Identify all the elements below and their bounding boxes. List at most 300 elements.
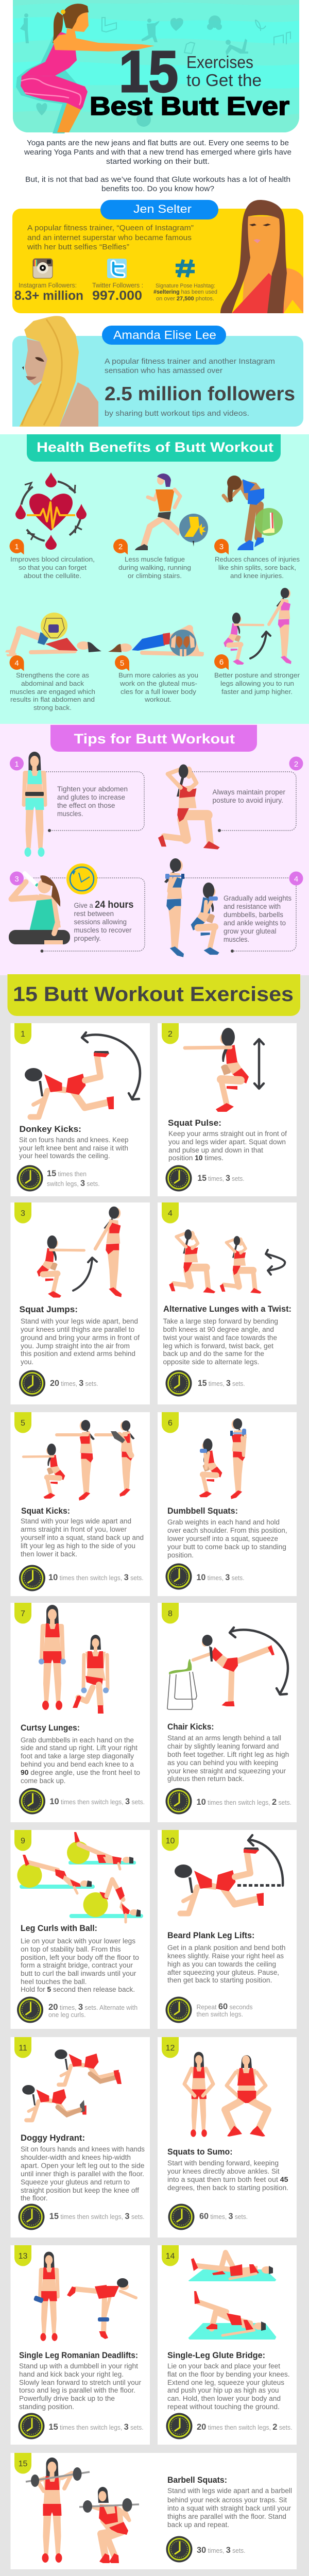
clock icon xyxy=(19,1788,45,1815)
number tab xyxy=(14,2245,31,2266)
number tab: 7 xyxy=(21,1609,25,1618)
tip 2 figure xyxy=(158,765,220,850)
card 11 doggy hydrant xyxy=(10,2037,150,2238)
number tab: 15 xyxy=(19,2460,28,2468)
number tab xyxy=(162,1603,179,1624)
card 13 single leg romanian deadlifts xyxy=(10,2245,150,2445)
clock icon xyxy=(19,1370,45,1396)
title line to get the: to Get the xyxy=(186,71,262,90)
description: Stand with your legs wide apart, bend xyxy=(21,1317,138,1325)
description: chair by slightly leaning forward and xyxy=(167,1742,279,1750)
tip 4 text xyxy=(224,894,291,943)
benefit 5 text: Burn more calories as you xyxy=(118,671,198,679)
title: Squat Kicks: xyxy=(21,1506,70,1516)
clock icon xyxy=(19,2413,44,2439)
hero background xyxy=(13,0,299,132)
description: you and legs wider apart. Squat down xyxy=(168,1138,286,1146)
benefit 5 text: workout. xyxy=(144,696,171,703)
clock icon xyxy=(16,1165,43,1191)
description: 90 degree angle, use the front heel to xyxy=(21,1769,140,1776)
reps: 15 times then xyxy=(47,1168,87,1178)
heading tab xyxy=(50,725,257,752)
benefit 5 text xyxy=(118,671,198,703)
tip 1 dot xyxy=(48,829,51,832)
description: your knee straight and squeezing your xyxy=(167,1767,286,1775)
description: Powerfully drive back up to the xyxy=(19,2395,115,2402)
name pill xyxy=(102,326,226,345)
intro text: Yoga pants are the new jeans and flat butts are out. Every one seems to be xyxy=(27,139,289,147)
tip 4 badge xyxy=(289,872,303,885)
benefit 3 text: like shin splits, sore back, xyxy=(218,564,296,571)
tip 3 text: sessions allowing xyxy=(74,918,127,926)
tip 1 text: the effect on those xyxy=(57,802,115,809)
benefit 2 text xyxy=(118,555,191,580)
benefit 5 text: work on the gluteal mus- xyxy=(119,680,197,687)
description: your left knee bent and raise it with xyxy=(19,1144,128,1152)
tip 4 text: and resistance with xyxy=(224,903,281,910)
description xyxy=(167,2487,292,2529)
description: Extend one leg, squeeze your gluteus xyxy=(167,2379,284,2386)
description: Stand with your legs wide apart and xyxy=(21,1517,131,1525)
tip 2 badge xyxy=(289,756,303,771)
card 8 chair kicks xyxy=(158,1603,297,1822)
number tab: 10 xyxy=(166,1837,175,1845)
tip 2 dot xyxy=(218,829,221,832)
description: Stand with legs wide apart and a barbell xyxy=(167,2487,292,2495)
number tab xyxy=(14,1603,31,1624)
badge 2 xyxy=(113,539,128,554)
tip 3 badge xyxy=(10,872,24,885)
reps: 20 times, 3 sets. Alternate with xyxy=(48,2002,138,2012)
stat: signature hashtag: on over 27,500 photos. xyxy=(156,296,214,302)
tip 1 badge: 1 xyxy=(14,760,19,769)
description: apart. Open your left leg out to the side xyxy=(21,2162,144,2170)
title: Doggy Hydrant: xyxy=(21,2133,85,2143)
clock icon xyxy=(166,1370,192,1396)
description: as you can behind you with keeping xyxy=(167,1759,278,1767)
number tab xyxy=(14,1830,31,1851)
number tab: 4 xyxy=(168,1209,173,1218)
description: high as you can towards the ceiling xyxy=(167,1960,276,1968)
reps: 10 times then switch legs, 2 sets. xyxy=(197,1797,291,1807)
tip 3 text: properly. xyxy=(74,935,101,942)
hero banner xyxy=(13,0,299,133)
tip 3 text xyxy=(74,900,134,942)
card 9 leg curls with ball xyxy=(10,1830,150,2029)
clock icon xyxy=(166,1997,192,2023)
tip 4 text: and ankle weights to xyxy=(224,919,286,927)
closing line: by sharing butt workout tips and videos. xyxy=(105,409,249,418)
tip 4 text: grow your gluteal xyxy=(224,927,276,935)
panel: exercises xyxy=(0,974,309,2576)
description xyxy=(21,1517,144,1558)
benefit 4 text xyxy=(10,671,95,711)
reps: 30 times, 3 sets. xyxy=(197,2545,245,2555)
badge 2: 2 xyxy=(118,543,123,551)
icon: heart circulation xyxy=(15,472,87,550)
description xyxy=(21,1317,140,1366)
description: then lower it back. xyxy=(21,1550,77,1558)
tip 3 badge: 3 xyxy=(14,875,19,884)
badge 1 xyxy=(10,539,24,554)
title: Donkey Kicks: xyxy=(20,1125,81,1134)
intro text xyxy=(24,139,291,193)
tip 2 badge: 2 xyxy=(294,760,298,769)
tip 2 dotted box xyxy=(192,772,296,831)
portrait Amanda xyxy=(20,316,98,427)
description: Lie on your back with your lower legs xyxy=(21,1937,135,1945)
title: Beard Plank Leg Lifts: xyxy=(167,1931,254,1940)
tip 4 text: dumbbells, barbells xyxy=(224,911,283,919)
clock icon xyxy=(166,1788,192,1815)
benefit 4 text: abdominal and back xyxy=(21,680,84,687)
benefit 2 text: during walking, running xyxy=(118,564,191,571)
exercise figure xyxy=(33,2251,136,2341)
description: Get in a plank position and bend both xyxy=(167,1944,285,1952)
stat: instagram followers: Instagram Followers: xyxy=(19,282,77,289)
icon: twitter xyxy=(107,259,127,278)
tip 4 dotted box xyxy=(184,878,296,951)
panel: tips xyxy=(0,724,309,975)
description xyxy=(163,1317,278,1366)
title: Alternative Lunges with a Twist: xyxy=(163,1304,291,1314)
number tab: 3 xyxy=(21,1209,25,1218)
description: can. Hold, then lower your body and xyxy=(167,2395,281,2402)
title: Curtsy Lunges: xyxy=(21,1723,80,1733)
description: Grab dumbbells in each hand on the xyxy=(21,1736,134,1744)
stat: instagram followers xyxy=(14,282,83,303)
description: on top of stability ball. From this xyxy=(21,1945,121,1953)
clock icon xyxy=(166,1563,192,1590)
section background xyxy=(0,724,309,975)
exercise figure xyxy=(185,1028,264,1112)
description: arms straight in front of you, lower xyxy=(21,1526,127,1533)
description: heel touches the ball. xyxy=(21,1978,87,1986)
reps xyxy=(197,2002,252,2018)
benefit 5 text: cles for a full lower body xyxy=(121,688,197,696)
benefit 4 text: muscles are engaged which xyxy=(10,688,95,696)
tip 4 dot xyxy=(231,950,234,953)
tip 1 dotted box xyxy=(46,772,144,831)
description: knees slightly. Raise your right heel as xyxy=(167,1952,284,1960)
reps: 15 times then switch legs, 3 sets. xyxy=(49,2211,144,2221)
description: Sit on fours hands and knees. Keep xyxy=(19,1136,129,1144)
exercise figure xyxy=(184,2052,268,2137)
number tab: 12 xyxy=(166,2044,175,2053)
card 2 squat pulse xyxy=(158,1023,297,1196)
description: Sit on fours hands and knees with hands xyxy=(21,2145,145,2153)
reps xyxy=(47,1168,100,1188)
exercise figure xyxy=(188,2252,276,2340)
reps: 60 times, 3 sets. xyxy=(199,2211,248,2221)
clock icon xyxy=(166,2536,193,2563)
tip 3 text: rest between xyxy=(74,910,114,918)
exercise figure xyxy=(26,2458,139,2563)
tip 3 text: muscles to recover xyxy=(74,926,132,934)
benefit 6 text xyxy=(214,671,300,696)
description: lower yourself into a squat, squeeze xyxy=(167,1535,278,1543)
clock icon xyxy=(17,1997,43,2023)
tip 1 figure xyxy=(24,752,45,857)
tip 3 clock icon xyxy=(66,863,97,894)
number tab xyxy=(14,1202,31,1223)
number tab: 2 xyxy=(168,1030,173,1039)
title line exercises: Exercises xyxy=(186,53,253,72)
name: Amanda Elise Lee xyxy=(113,328,216,342)
reps: 10 times, 3 sets. xyxy=(197,1572,244,1582)
exercise figure xyxy=(199,1418,247,1499)
number tab: 13 xyxy=(19,2252,28,2261)
description: Stand up with a dumbbell in your right xyxy=(19,2362,138,2370)
benefit 3 text: Reduces chances of injuries xyxy=(215,555,300,563)
description: form a straight bridge, contract your xyxy=(21,1961,133,1969)
description: behind your neck across your traps. Sit xyxy=(167,2496,287,2504)
exercise figure xyxy=(169,1229,285,1294)
description: ground and bring your arms in front of xyxy=(21,1334,140,1342)
benefit 4 text: strong back. xyxy=(33,704,72,711)
card 10 beard plank leg lifts xyxy=(158,1830,297,2029)
description xyxy=(167,2362,290,2411)
tip 1 text: muscles. xyxy=(57,810,83,818)
badge 3 xyxy=(214,539,229,554)
description: Stand at an arms length behind a tall xyxy=(167,1734,281,1742)
description xyxy=(19,1136,129,1160)
card 7 curtsy lunges xyxy=(10,1603,150,1822)
description: both feet together. Lift right leg as high xyxy=(167,1751,289,1758)
stat: signature hashtag: #seltering has been used xyxy=(153,289,217,295)
title: Squat Jumps: xyxy=(20,1305,78,1314)
description: lift your leg as high to the side of you xyxy=(21,1542,135,1550)
card 3 squat jumps xyxy=(10,1202,150,1404)
number tab: 1 xyxy=(21,1030,25,1039)
reps: 20 times, 3 sets. xyxy=(50,1378,98,1388)
title: Leg Curls with Ball: xyxy=(21,1924,97,1933)
number tab xyxy=(162,1202,179,1223)
description: foot and take a large step diagonally xyxy=(21,1752,134,1760)
benefit 4 text: results in flat abdomen and xyxy=(10,696,95,703)
benefit 1 text xyxy=(10,555,95,580)
tip 3 text: Give a 24 hours xyxy=(74,900,134,910)
description: you. Jump straight into the air from xyxy=(21,1342,130,1350)
title number 15: 15 xyxy=(119,39,178,104)
description: Slowly lean forward to stretch until your xyxy=(19,2379,142,2386)
description: your heel towards the ceiling. xyxy=(19,1152,110,1160)
stat: signature hashtag: Signature Pose Hashtag: xyxy=(156,283,215,289)
number tab: 11 xyxy=(19,2044,27,2053)
description: thighs are parallel with the floor. Stand xyxy=(167,2513,286,2520)
description: position 10 times. xyxy=(168,1154,224,1162)
reps: Repeat 60 seconds xyxy=(197,2002,252,2011)
section background xyxy=(0,434,309,724)
reps: then switch legs. xyxy=(197,2011,243,2018)
figure: runner with foot inset xyxy=(135,473,208,550)
reps: one leg curls. xyxy=(48,2011,85,2019)
title: Squat Pulse: xyxy=(168,1118,221,1128)
number tab: 14 xyxy=(166,2252,175,2261)
description: A popular fitness trainer and another Instagram xyxy=(105,357,275,366)
clock icon xyxy=(166,2413,193,2439)
description: behind you and bend each knee to a xyxy=(21,1760,134,1768)
description: standing position. xyxy=(19,2403,74,2411)
title: Squats to Sumo: xyxy=(167,2147,233,2157)
tip 1 text: Tighten your abdomen xyxy=(57,785,128,793)
description: A popular fitness trainer, “Queen of Instagram” xyxy=(27,224,194,232)
exercise figure xyxy=(39,1605,109,1714)
tip 1 text xyxy=(57,785,128,818)
description: and push your hip up as high as you xyxy=(167,2386,279,2394)
description: butt to curl the ball inwards until your xyxy=(21,1970,136,1977)
tip 4 badge: 4 xyxy=(294,875,298,884)
heading: Tips for Butt Workout xyxy=(74,731,235,747)
clock icon xyxy=(168,2204,195,2230)
title: Single Leg Romanian Deadlifts: xyxy=(19,2351,138,2360)
description: Keep your arms straight out in front of xyxy=(168,1130,287,1138)
description: with her butt selfies “Belfies” xyxy=(27,243,129,251)
benefit 6 text: legs allowing you to run xyxy=(220,680,294,687)
description: gluteus then return back. xyxy=(167,1775,244,1783)
description xyxy=(167,2159,288,2192)
description: back up and repeat. xyxy=(167,2521,229,2529)
woman squatting illustration xyxy=(16,4,154,133)
description: your knees until thighs are parallel to xyxy=(21,1326,134,1333)
number tab xyxy=(14,1023,31,1044)
tip 3 dotted box xyxy=(29,878,145,951)
number tab xyxy=(14,1412,31,1433)
description: opposite side to alternate legs. xyxy=(163,1358,260,1366)
number tab xyxy=(162,2245,179,2266)
benefit 3 text: and knee injuries. xyxy=(230,572,284,580)
heading tab xyxy=(7,974,300,1016)
ghost icons xyxy=(20,13,248,127)
description: Start with bending forward, keeping xyxy=(167,2159,279,2167)
tip 2 text: posture to avoid injury. xyxy=(212,796,283,804)
badge 5: 5 xyxy=(120,659,124,668)
clock icon xyxy=(19,1565,45,1591)
description xyxy=(21,1937,139,1993)
number tab xyxy=(162,2037,179,2058)
number tab xyxy=(162,1830,179,1851)
panel: Jen Selter xyxy=(12,200,303,313)
stat: twitter followers: Twitter Followers : xyxy=(92,282,143,289)
title: Dumbbell Squats: xyxy=(167,1506,238,1516)
description xyxy=(21,2145,145,2202)
tip 2 text xyxy=(212,788,285,804)
number tab xyxy=(14,2037,31,2058)
reps: 15 times, 3 sets. xyxy=(198,1378,245,1388)
reps xyxy=(48,2002,138,2019)
description: torso and leg is parallel with the floor. xyxy=(19,2386,135,2394)
title: Single-Leg Glute Bridge: xyxy=(167,2351,265,2360)
exercise figure xyxy=(25,1032,140,1117)
description: then get back to starting position. xyxy=(167,1976,272,1984)
title: Barbell Squats: xyxy=(167,2476,227,2485)
number tab xyxy=(162,1412,179,1433)
heading: 15 Butt Workout Exercises xyxy=(13,983,294,1006)
stat: followers: 2.5 million followers xyxy=(105,383,295,405)
number tab: 5 xyxy=(21,1419,25,1428)
description: until inner thigh is parallel with the floor. xyxy=(21,2170,144,2178)
tip 3 figure: woman drinking xyxy=(9,873,70,944)
description: Squeeze your gluteus and return to xyxy=(21,2178,130,2186)
tip 1 text: and glutes to increase xyxy=(57,793,125,801)
description xyxy=(167,1734,289,1783)
intro text: wearing Yoga Pants and with that a new trend has emerged where girls have xyxy=(24,148,291,157)
description: the floor. xyxy=(21,2194,48,2202)
figure: bridge with gluteal inset xyxy=(108,629,204,656)
benefit 6 text: Better posture and stronger xyxy=(214,671,300,679)
description: hand and kick back your right leg. xyxy=(19,2370,124,2378)
description: yourself into a squat, stand back up and xyxy=(21,1534,144,1541)
stat: instagram followers: 8.3+ million xyxy=(14,289,83,303)
description: and pulse up and down in that xyxy=(168,1146,263,1154)
description: Hold for 5 second then release back. xyxy=(21,1986,135,1993)
description: twist your waist and face towards the xyxy=(163,1334,277,1342)
description: leg which is forward, twist back, get xyxy=(163,1342,273,1350)
description: side and stand up right. Lift your right xyxy=(21,1744,138,1752)
description: this position and extend arms behind xyxy=(21,1350,135,1358)
clock icon xyxy=(19,2204,44,2230)
description: Lie on your back and place your feet xyxy=(167,2362,280,2370)
description xyxy=(167,1518,287,1559)
number tab: 6 xyxy=(168,1419,173,1428)
section background xyxy=(0,975,309,2576)
description: shoulder-width and knees hip-width xyxy=(21,2154,131,2161)
exercise figure xyxy=(22,2049,122,2120)
description: over each shoulder. From this position, xyxy=(167,1527,287,1534)
icon: instagram xyxy=(33,259,53,278)
title best butt ever: Best Butt Ever xyxy=(90,92,289,121)
description: flat on the floor by bending your knees. xyxy=(167,2370,290,2378)
description: after squeezing your gluteus. Pause, xyxy=(167,1969,279,1976)
card 4 lunges with a twist xyxy=(158,1202,297,1404)
badge 6: 6 xyxy=(219,658,224,667)
reps: 15 times then switch legs, 3 sets. xyxy=(48,2422,144,2432)
reps: 20 times then switch legs, 2 sets. xyxy=(197,2422,293,2432)
card 14 single-leg glute bridge xyxy=(158,2245,297,2445)
reps: switch legs, 3 sets. xyxy=(47,1178,100,1188)
badge 4: 4 xyxy=(14,659,19,668)
description: come back up. xyxy=(21,1777,65,1785)
card 5 squat kicks xyxy=(10,1412,150,1596)
portrait Jen Selter xyxy=(220,200,303,313)
benefit 1 text: Improves blood circulation, xyxy=(10,555,95,563)
description xyxy=(105,357,275,375)
aqua panel background xyxy=(12,336,303,427)
badge 3: 3 xyxy=(219,543,224,551)
tip 4 text: Gradually add weights xyxy=(224,894,291,902)
exercise figure xyxy=(167,1628,288,1709)
number tab xyxy=(14,2453,31,2474)
name: Jen Selter xyxy=(133,202,192,215)
description: into a squat with straight back until your xyxy=(167,2504,291,2512)
stat: twitter followers xyxy=(92,282,143,303)
icon: hashtag xyxy=(176,260,195,277)
benefit 3 text xyxy=(215,555,300,580)
description: sensation who has amassed over xyxy=(105,366,222,375)
badge 1: 1 xyxy=(14,543,19,551)
description: straight position but keep the knee off xyxy=(21,2187,139,2194)
yellow panel background xyxy=(12,209,303,313)
name pill xyxy=(100,200,218,219)
exercise figure xyxy=(37,1207,122,1298)
benefit 1 text: so that you can forget xyxy=(19,564,87,571)
card 1 donkey kicks xyxy=(10,1023,150,1196)
benefit 2 text: Less muscle fatigue xyxy=(125,555,185,563)
description: Grab weights in each hand and hold xyxy=(167,1518,280,1526)
number tab: 9 xyxy=(21,1837,25,1845)
description xyxy=(167,1944,285,1984)
description xyxy=(27,224,194,251)
